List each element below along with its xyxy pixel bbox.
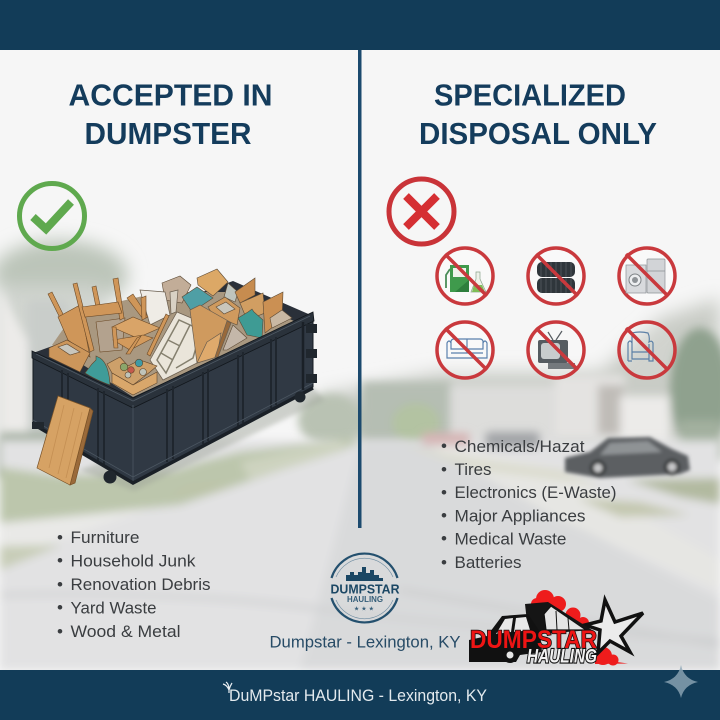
list: accepted items <box>57 528 211 641</box>
top banner <box>0 0 720 50</box>
icon: green check <box>20 184 84 248</box>
background: lawns and road <box>0 432 720 670</box>
list: accepted items: Renovation Debris <box>70 575 211 594</box>
logo: wordmark hauling: HAULING <box>527 646 597 668</box>
list: accepted items: • <box>57 528 63 547</box>
background: houses and trees detail <box>0 290 720 477</box>
list: accepted items: Wood & Metal <box>70 622 180 641</box>
contents: right cluster <box>162 269 292 350</box>
sparkle watermark <box>664 665 698 698</box>
list: specialized items <box>441 436 616 572</box>
dumpster side latches <box>32 324 317 484</box>
list: specialized items: • <box>441 553 447 572</box>
list: specialized items: • <box>441 436 447 456</box>
list: specialized items: Tires <box>454 460 492 479</box>
dumpster left wall <box>33 356 133 482</box>
contents: mirror, window and plank <box>140 290 231 380</box>
round dumpstar logo: HAULING <box>347 595 383 604</box>
list: specialized items: Batteries <box>454 553 522 572</box>
list: accepted items: Household Junk <box>70 552 196 570</box>
list: accepted items: Yard Waste <box>70 598 156 618</box>
prohibited icon grid <box>437 248 675 378</box>
bottom banner <box>0 670 720 720</box>
dumpster wall ribs <box>33 322 313 483</box>
heading: specialized disposal only: DISPOSAL ONLY <box>419 117 657 151</box>
icon: no appliances <box>619 248 675 304</box>
round dumpstar logo <box>330 554 400 622</box>
logo: wordmark dumpstar: DUMPSTAR <box>470 626 597 654</box>
heading: accepted in dumpster <box>68 78 272 151</box>
contents: wooden chairs <box>48 278 169 357</box>
list: specialized items: Major Appliances <box>454 506 586 526</box>
list: accepted items: • <box>57 551 63 570</box>
icon: no chemicals <box>437 248 493 304</box>
icon: no television <box>528 322 584 378</box>
dumpster top rim <box>32 312 314 408</box>
parked car <box>565 437 690 478</box>
logo: black star <box>585 600 643 653</box>
logo: truck <box>469 614 542 663</box>
round dumpstar logo: ★★★ <box>354 606 376 612</box>
contents: front boxes and bags <box>49 340 157 395</box>
list: specialized items: • <box>441 483 447 502</box>
banner sprout icon <box>223 682 232 693</box>
logo: red smoke <box>531 590 628 666</box>
list: accepted items: • <box>57 622 63 641</box>
icon: red cross <box>389 179 454 244</box>
illustration: loaded dumpster <box>32 269 325 491</box>
list: specialized items: • <box>441 529 447 548</box>
background: trees and hills <box>0 240 720 470</box>
dumpster long wall <box>133 319 313 482</box>
heading: specialized disposal only <box>419 78 657 151</box>
heading: accepted in dumpster: ACCEPTED IN <box>68 78 272 112</box>
icon: no armchair <box>619 322 675 378</box>
list: specialized items: Medical Waste <box>454 530 566 548</box>
dumpster shadow <box>80 385 325 491</box>
round dumpstar logo: DUMPSTAR <box>330 582 400 596</box>
red and black hauling logo <box>469 590 643 668</box>
list: accepted items: • <box>57 598 63 617</box>
logo: dump bed <box>525 602 592 634</box>
list: accepted items: • <box>57 575 63 594</box>
list: specialized items: Electronics (E-Waste) <box>454 483 616 502</box>
heading: specialized disposal only: SPECIALIZED <box>434 78 626 112</box>
list: specialized items: Chemicals/Hazat <box>454 437 585 456</box>
list: accepted items: Furniture <box>70 528 140 547</box>
icon: no sofa <box>437 322 493 378</box>
list: specialized items: • <box>441 506 447 525</box>
banner text: DuMPstar HAULING - Lexington, KY <box>229 686 487 705</box>
center divider <box>358 50 362 528</box>
list: specialized items: • <box>441 460 447 479</box>
icon: no tires <box>528 248 584 304</box>
dumpster interior <box>33 281 313 402</box>
heading: accepted in dumpster: DUMPSTER <box>84 117 252 151</box>
location caption: Dumpstar - Lexington, KY <box>270 632 460 652</box>
leaning wood board <box>37 396 93 485</box>
